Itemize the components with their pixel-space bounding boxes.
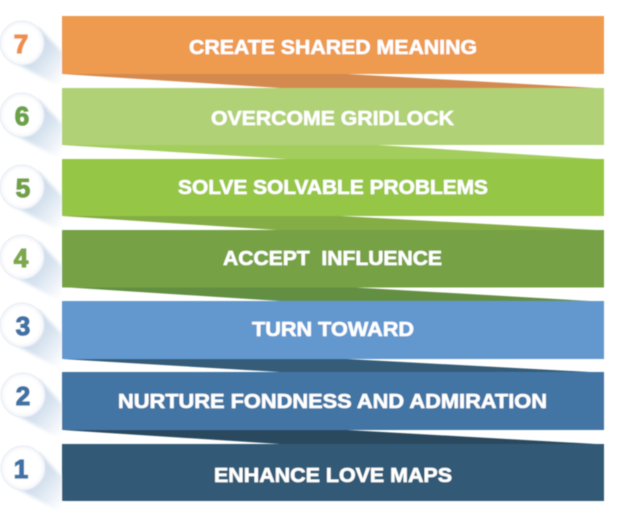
step 7 bar: CREATE SHARED MEANING	[189, 37, 477, 59]
badge 2	[1, 373, 62, 440]
badge 6: 6	[15, 101, 29, 131]
wedge: between bars 3 and 2	[62, 359, 590, 372]
badge 4: 4	[14, 243, 29, 273]
step 5 bar: SOLVE SOLVABLE PROBLEMS	[178, 177, 488, 199]
badge 5	[0, 165, 62, 232]
wedge: between bars 4 and 3	[62, 287, 590, 301]
badge 3: 3	[16, 311, 30, 341]
step 4 bar	[62, 230, 604, 288]
step 2 bar	[62, 372, 604, 430]
step 3 bar	[62, 301, 604, 359]
wedge: between bars 6 and 5	[62, 145, 596, 159]
wedge: between bars 7 and 6	[62, 74, 596, 88]
badge 1	[1, 446, 62, 513]
badge 3	[0, 303, 62, 370]
step 7 bar	[62, 16, 604, 74]
badge 7	[0, 21, 62, 88]
step 4 bar: ACCEPT INFLUENCE	[223, 248, 442, 270]
badge 2: 2	[16, 381, 30, 411]
wedge: between bars 2 and 1	[62, 430, 596, 444]
badge 4	[0, 235, 62, 302]
step 3 bar: TURN TOWARD	[252, 319, 414, 341]
badge 1: 1	[14, 454, 28, 484]
step 1 bar	[62, 444, 604, 501]
step 2 bar: NURTURE FONDNESS AND ADMIRATION	[118, 391, 547, 413]
badge 7: 7	[14, 29, 28, 59]
step 1 bar: ENHANCE LOVE MAPS	[214, 465, 452, 487]
step 6 bar: OVERCOME GRIDLOCK	[211, 108, 455, 130]
step 6 bar	[62, 88, 604, 145]
badge 5: 5	[16, 173, 30, 203]
step 5 bar	[62, 159, 604, 216]
badge 6	[0, 93, 62, 160]
wedge: between bars 5 and 4	[62, 216, 596, 230]
